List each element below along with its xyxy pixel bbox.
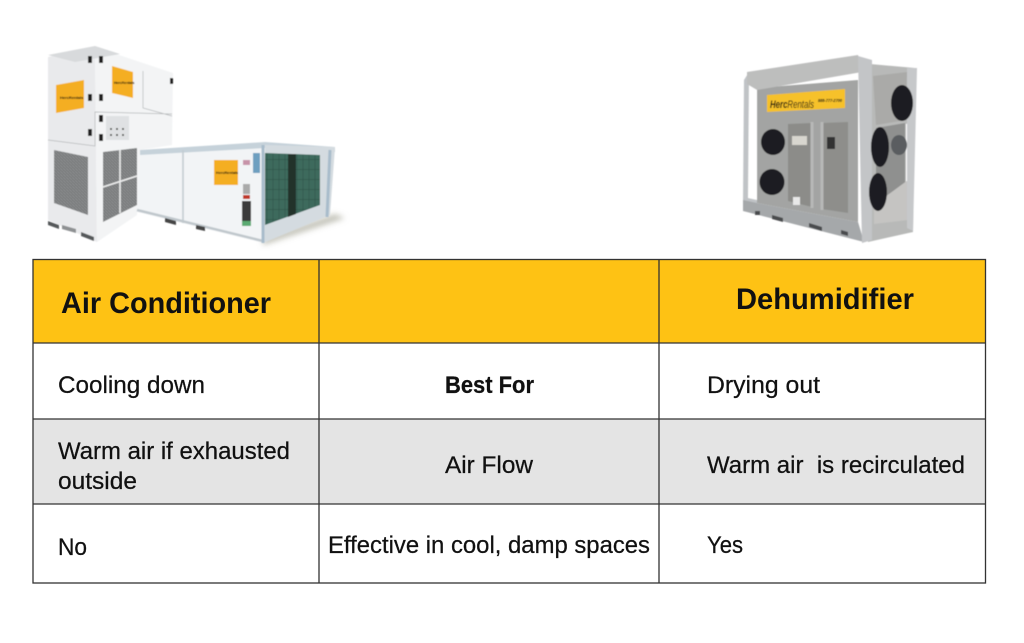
row: air flow: Warm air if exhausted [58, 438, 290, 465]
icon: dehumidifier frame [743, 55, 917, 243]
icon: tall air conditioner tower: HercRentals [60, 95, 84, 100]
image: air conditioner units [48, 46, 345, 245]
icon: tall air conditioner tower: HercRentals [114, 81, 134, 85]
row: air flow: Air Flow [445, 452, 533, 479]
icon: tall air conditioner tower [48, 46, 173, 242]
row: best for [58, 372, 820, 399]
row: best for: Best For [445, 372, 534, 399]
air flow row background [33, 419, 986, 504]
icon: low horizontal air conditioner unit [137, 142, 345, 245]
icon: yellow brand banner: 888-777-2700 [818, 98, 842, 103]
row: best for: Drying out [707, 372, 820, 399]
table grid [33, 260, 986, 583]
comparison table [33, 260, 986, 583]
row: air flow [58, 438, 965, 495]
icon: forklift pockets [755, 211, 848, 236]
icon: black fans [760, 85, 913, 211]
header: dehumidifier: Dehumidifier [736, 283, 914, 316]
row: air flow: Warm air is recirculated [707, 452, 965, 479]
image: dehumidifier unit [743, 55, 917, 243]
icon: low horizontal air conditioner unit: HercRentals [216, 171, 238, 175]
icon: steel access doors [788, 122, 848, 213]
row: effective in cool, damp spaces: Yes [707, 532, 743, 559]
row: effective in cool, damp spaces: Effective in cool, damp spaces [328, 532, 650, 559]
row: effective in cool, damp spaces: No [58, 534, 87, 561]
header row background [33, 260, 986, 343]
row: best for: Cooling down [58, 372, 205, 399]
header: air conditioner: Air Conditioner [61, 287, 271, 320]
row: effective in cool, damp spaces [58, 532, 743, 561]
row: air flow: outside [58, 468, 137, 495]
icon: yellow brand banner: HercRentals [770, 99, 814, 111]
icon: yellow brand banner [767, 89, 845, 112]
